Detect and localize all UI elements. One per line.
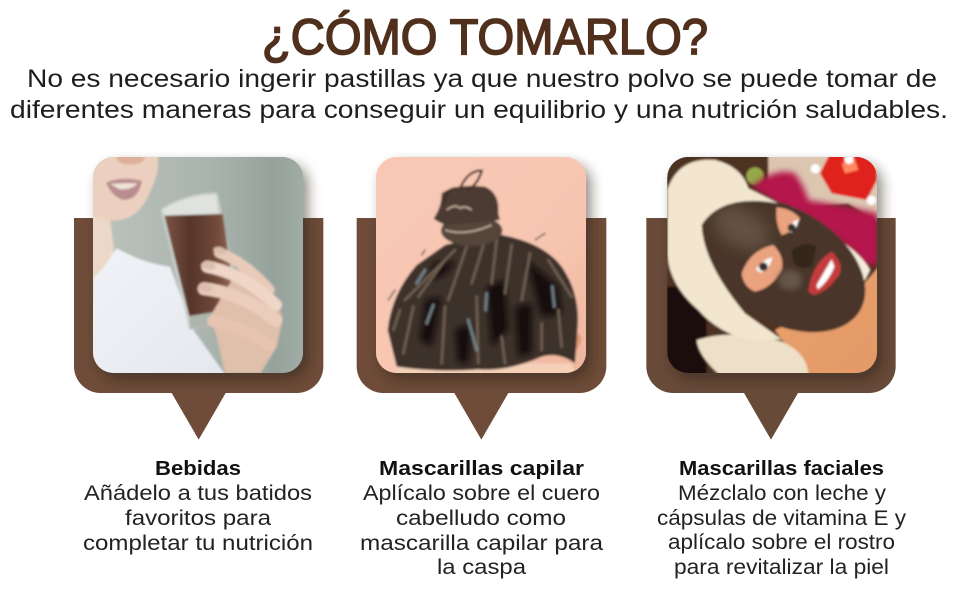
caption: mascarillas capilar: Aplícalo sobre el cuero <box>363 482 600 505</box>
panel: bebidas <box>74 151 323 555</box>
photo: woman with chocolate face mask <box>663 153 889 377</box>
caption: bebidas <box>83 458 313 555</box>
photo: hair with mask and bun <box>373 153 590 377</box>
caption: mascarillas faciales: cápsulas de vitamina E y <box>657 507 907 530</box>
caption: mascarillas faciales: Mézclalo con leche y <box>678 482 887 505</box>
caption: bebidas: Bebidas <box>155 458 241 480</box>
photo: woman holding chocolate shake <box>90 151 307 377</box>
panel: mascarillas faciales <box>646 153 907 579</box>
intro text: No es necesario ingerir pastillas ya que nuestro polvo se puede tomar de <box>27 65 937 93</box>
caption: mascarillas faciales: aplícalo sobre el rostro <box>668 531 895 554</box>
panel: mascarillas capilar <box>357 153 606 579</box>
caption: mascarillas capilar: Mascarillas capilar <box>379 458 584 480</box>
caption: mascarillas faciales: Mascarillas faciales <box>679 458 884 480</box>
speech bubble: faciales <box>646 218 896 440</box>
speech bubble: capilar <box>357 218 606 440</box>
caption: mascarillas capilar <box>360 458 603 579</box>
speech bubble: bebidas <box>74 218 323 440</box>
caption: bebidas: Añádelo a tus batidos <box>84 482 312 505</box>
caption: bebidas: favoritos para <box>125 507 271 530</box>
caption: mascarillas capilar: cabelludo como <box>396 507 566 530</box>
caption: mascarillas faciales <box>657 458 907 579</box>
intro text: diferentes maneras para conseguir un equilibrio y una nutrición saludables. <box>10 96 948 124</box>
caption: mascarillas capilar: mascarilla capilar para <box>360 532 603 555</box>
title: ¿CÓMO TOMARLO? <box>262 9 708 65</box>
caption: bebidas: completar tu nutrición <box>83 532 313 555</box>
caption: mascarillas capilar: la caspa <box>437 556 526 579</box>
intro text <box>10 65 948 124</box>
caption: mascarillas faciales: para revitalizar la piel <box>674 556 889 579</box>
